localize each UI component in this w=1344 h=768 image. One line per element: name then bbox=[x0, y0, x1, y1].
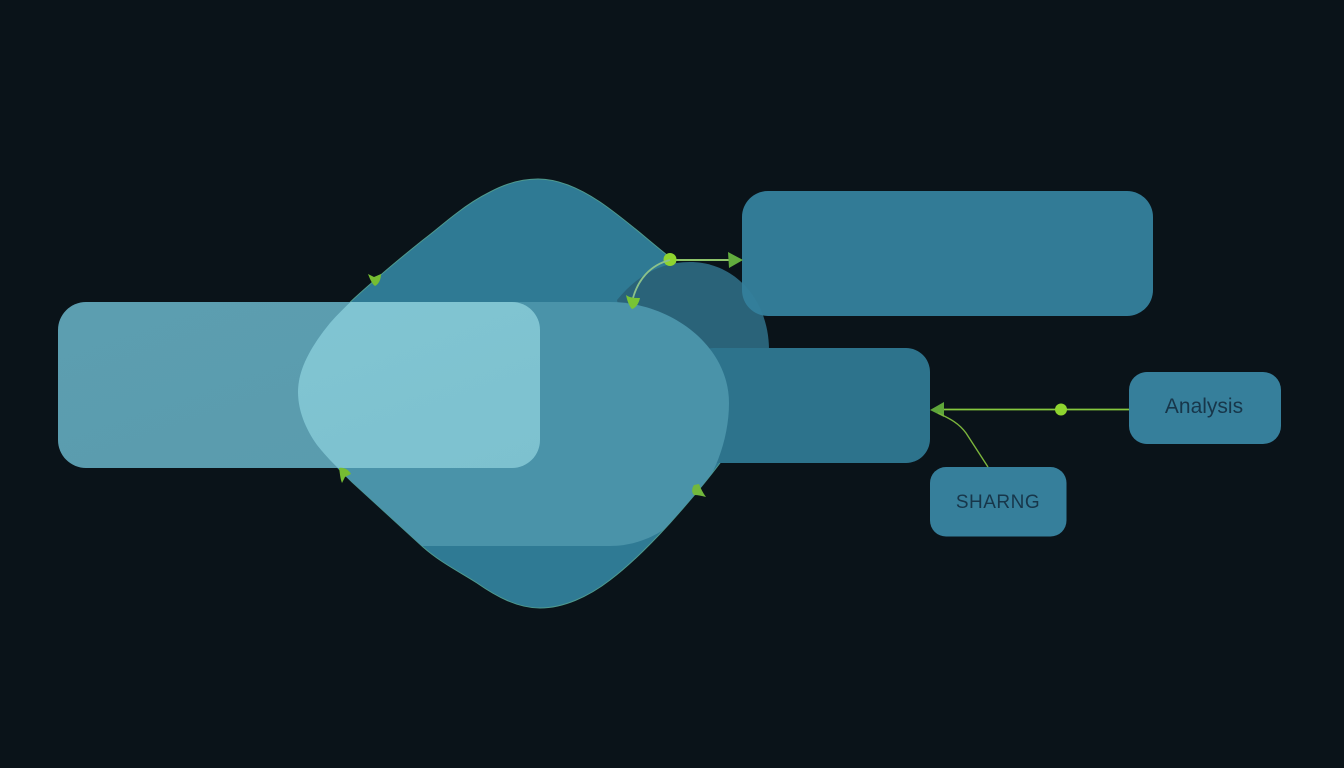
box: SHARNG: SHARNG bbox=[956, 492, 1040, 513]
arrowhead marker lower right bbox=[692, 484, 706, 497]
diagram bbox=[58, 178, 1281, 608]
arrow: Analysis to middle panel bbox=[930, 402, 1129, 417]
top right panel bbox=[742, 191, 1153, 316]
middle right panel bbox=[690, 348, 930, 463]
arrow: SHARNG to middle panel bbox=[938, 413, 988, 467]
dark circular shape behind bbox=[617, 262, 769, 400]
arrowhead marker upper left bbox=[368, 274, 381, 286]
box: Analysis bbox=[1129, 372, 1281, 444]
bright overlap lens bbox=[298, 302, 540, 468]
central diamond shape bbox=[298, 179, 770, 608]
arrow: dot curving to large panel bbox=[626, 260, 670, 309]
arrow: dot to top right panel bbox=[664, 252, 743, 268]
box: SHARNG bbox=[930, 467, 1066, 536]
large rounded panel clipped to diamond bbox=[338, 302, 729, 546]
arrowhead marker lower left bbox=[339, 468, 351, 483]
box: Analysis: Analysis bbox=[1165, 395, 1243, 418]
left wide panel bbox=[58, 302, 540, 468]
